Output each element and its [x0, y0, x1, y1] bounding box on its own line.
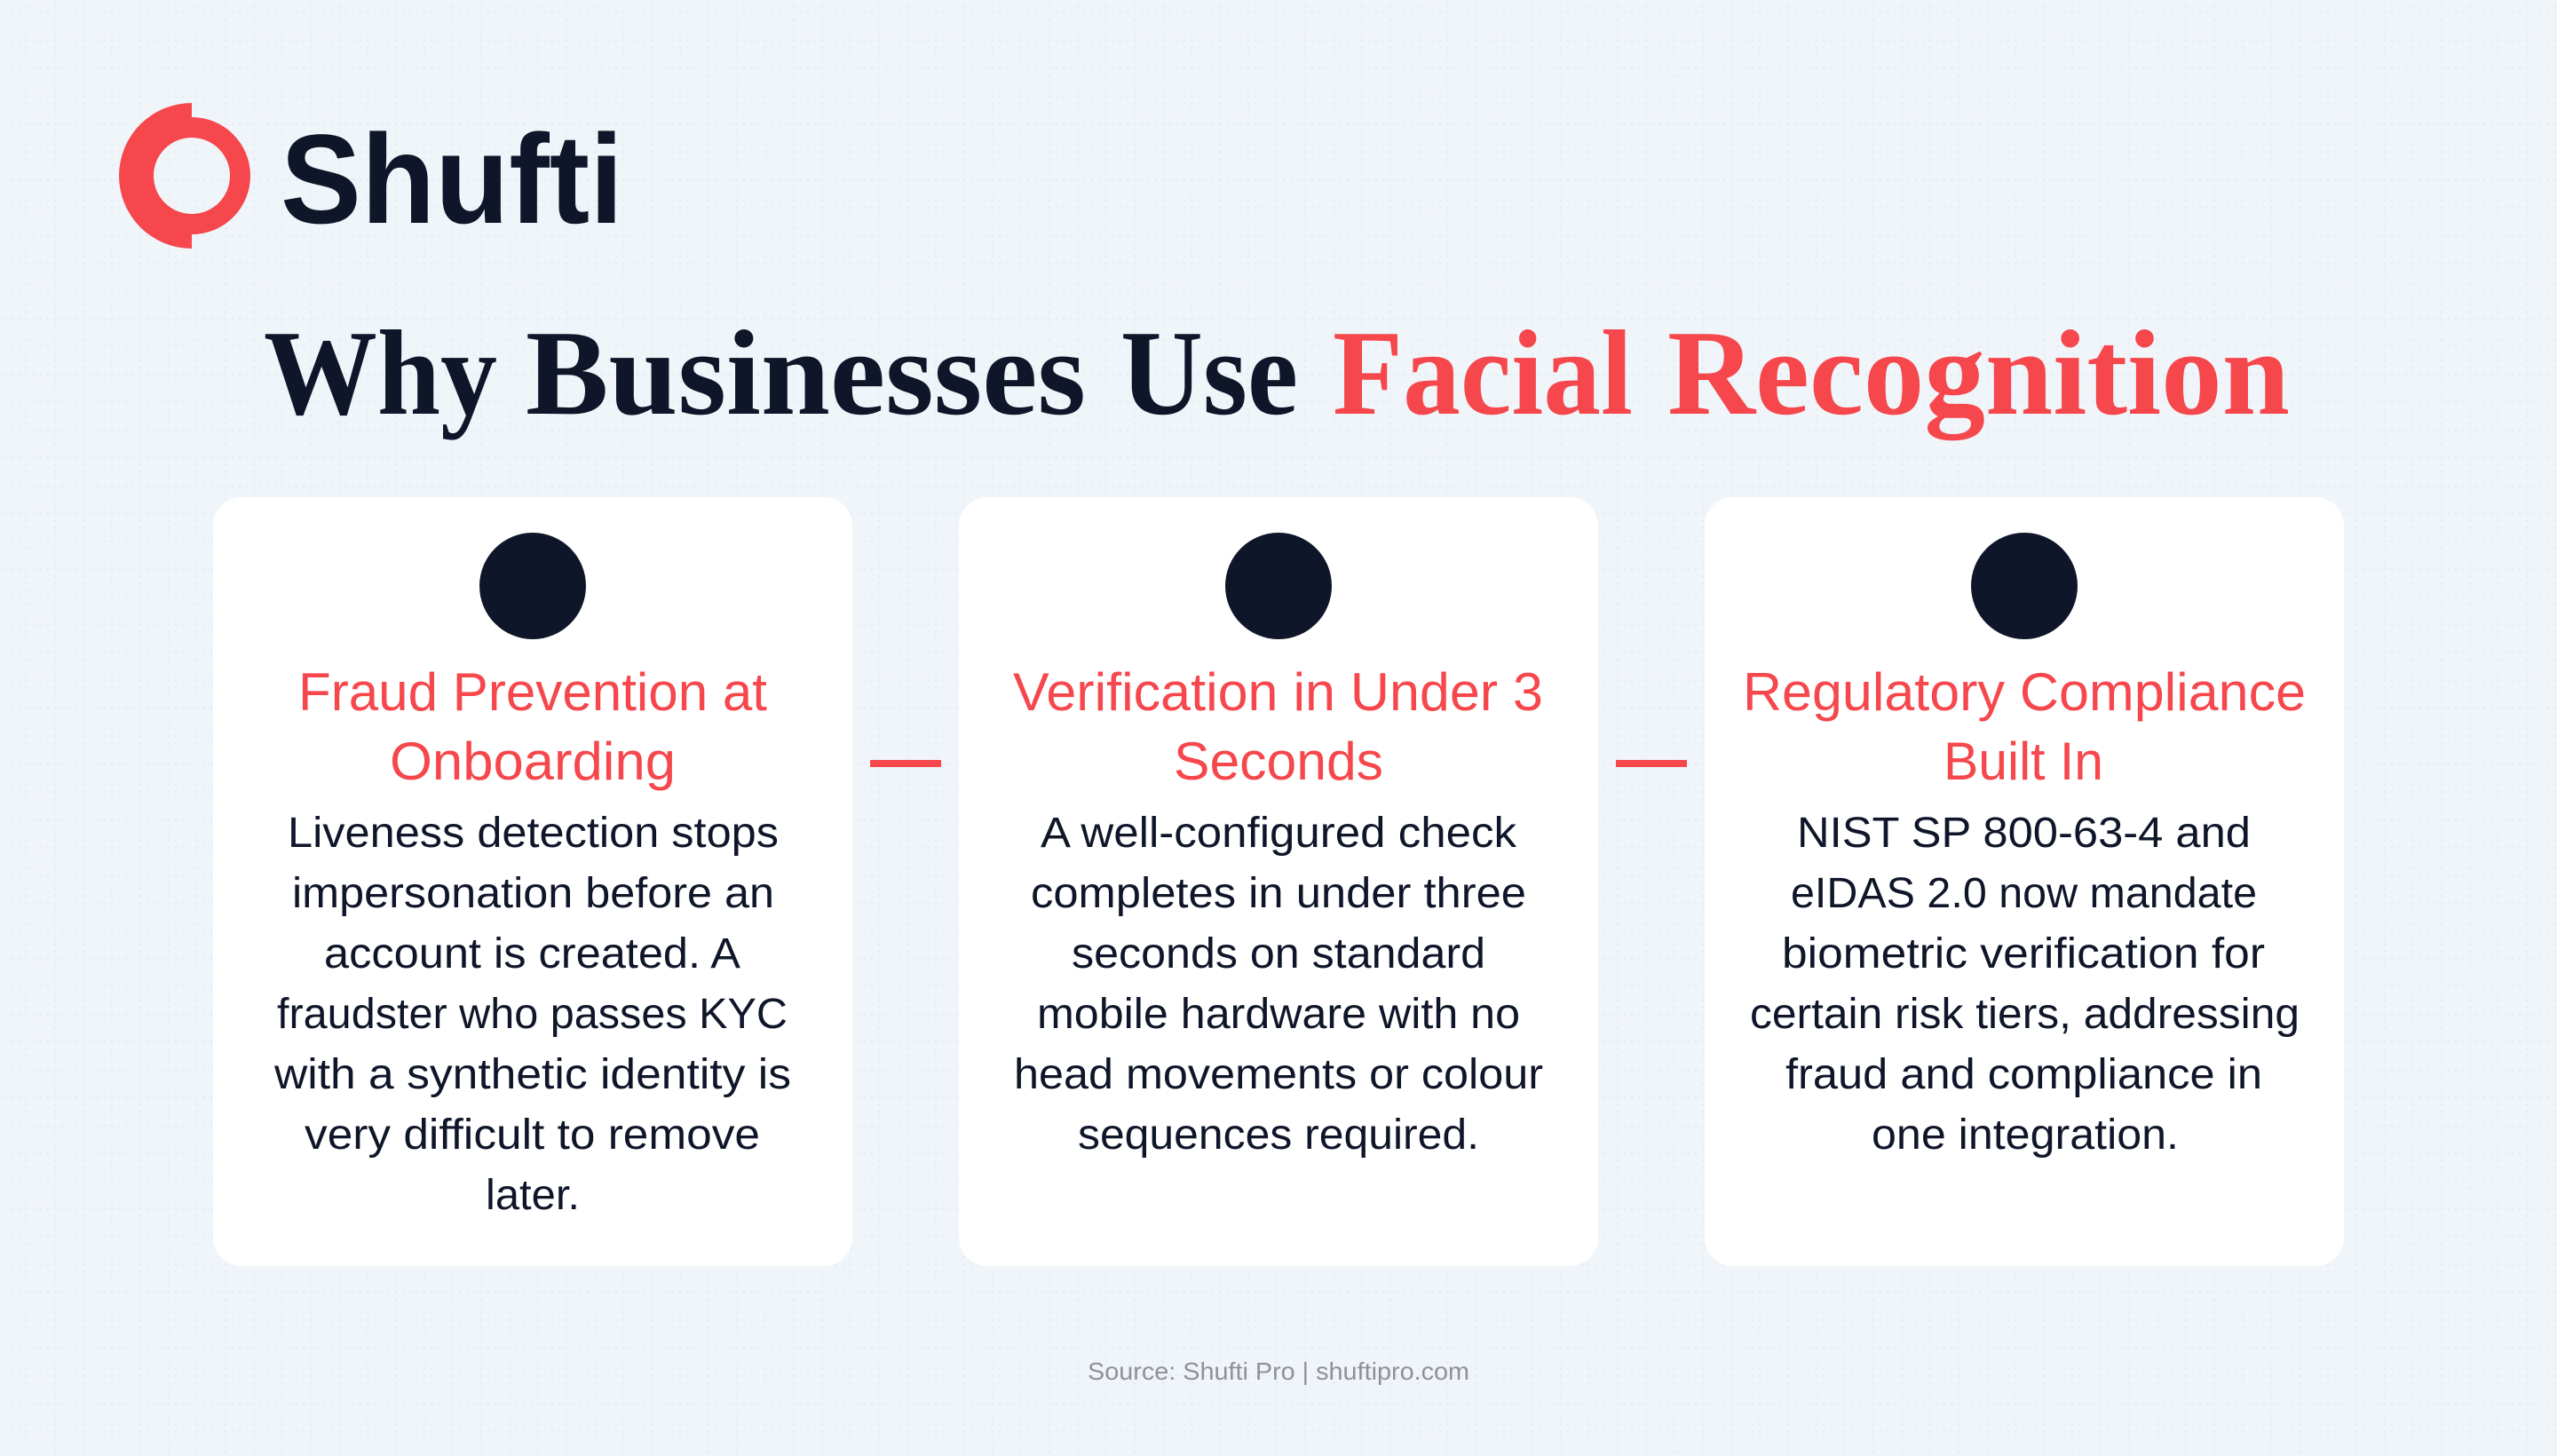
- panel: fraud prevention: [213, 497, 852, 1266]
- body text: regulatory compliance: [1750, 810, 2300, 1159]
- body text: verification speed: mobile hardware with no: [1037, 991, 1520, 1038]
- heading: verification speed: Verification in Under 3: [1013, 662, 1543, 722]
- body text: verification speed: seconds on standard: [1072, 930, 1485, 977]
- heading: verification speed: Seconds: [1174, 732, 1383, 791]
- heading: fraud prevention: Onboarding: [390, 732, 676, 791]
- title: Recognition: [1667, 305, 2290, 440]
- heading: regulatory compliance: Built In: [1943, 732, 2103, 791]
- icon: dark circle: [1225, 533, 1332, 639]
- body text: regulatory compliance: biometric verification for: [1782, 930, 2265, 977]
- body text: verification speed: [1014, 810, 1543, 1159]
- heading: verification speed: [1013, 662, 1543, 791]
- heading: regulatory compliance: Regulatory Compliance: [1743, 662, 2306, 722]
- body text: regulatory compliance: one integration.: [1872, 1112, 2179, 1159]
- body text: fraud prevention: account is created. A: [324, 930, 740, 977]
- heading: fraud prevention: Fraud Prevention at: [298, 662, 767, 722]
- logo wordmark: Shufti: [281, 109, 623, 250]
- title: Facial: [1333, 305, 1633, 440]
- body text: verification speed: A well-configured check: [1041, 810, 1517, 857]
- icon: dark circle: [1971, 533, 2078, 639]
- body text: fraud prevention: Liveness detection stops: [288, 810, 779, 857]
- body text: regulatory compliance: NIST SP 800-63-4 and: [1797, 810, 2251, 857]
- logo: Shufti: [119, 103, 623, 250]
- body text: verification speed: completes in under three: [1031, 870, 1526, 917]
- body text: regulatory compliance: certain risk tiers, addressing: [1750, 991, 2300, 1038]
- body text: fraud prevention: fraudster who passes KYC: [277, 991, 788, 1038]
- body text: fraud prevention: [273, 810, 791, 1219]
- heading: fraud prevention: [298, 662, 767, 791]
- arrow: connector 1: [870, 760, 941, 767]
- body text: fraud prevention: very difficult to remove: [305, 1112, 760, 1159]
- title: [264, 305, 2290, 440]
- title: Businesses: [526, 305, 1086, 440]
- body text: regulatory compliance: fraud and compliance in: [1785, 1051, 2262, 1098]
- title: Why: [264, 305, 497, 440]
- title: Use: [1120, 305, 1298, 440]
- source note: Source: Shufti Pro | shuftipro.com: [1088, 1357, 1469, 1385]
- heading: regulatory compliance: [1743, 662, 2306, 791]
- body text: fraud prevention: impersonation before an: [292, 870, 774, 917]
- body text: verification speed: head movements or colour: [1014, 1051, 1543, 1098]
- icon: Shufti ring: [119, 103, 250, 249]
- body text: verification speed: sequences required.: [1078, 1112, 1479, 1159]
- body text: regulatory compliance: eIDAS 2.0 now mandate: [1791, 870, 2257, 917]
- body text: fraud prevention: with a synthetic identity is: [273, 1051, 791, 1098]
- panel: verification speed: [959, 497, 1598, 1266]
- arrow: connector 2: [1616, 760, 1687, 767]
- panel: regulatory compliance: [1705, 497, 2344, 1266]
- body text: fraud prevention: later.: [486, 1172, 580, 1219]
- icon: dark circle: [479, 533, 586, 639]
